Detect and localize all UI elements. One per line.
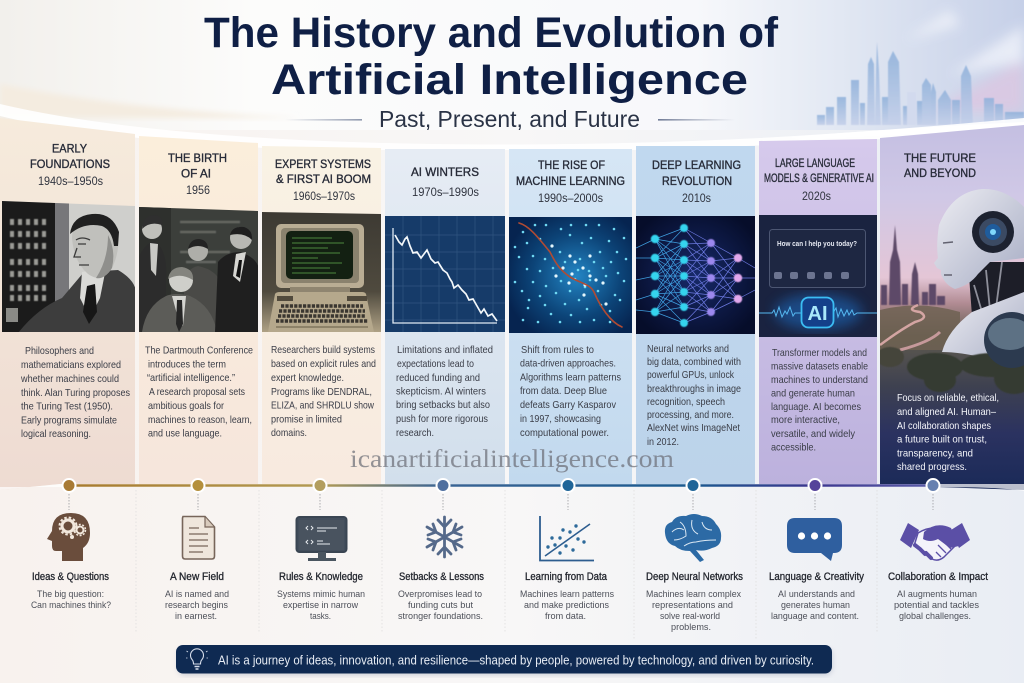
icon: chat bubble bbox=[787, 518, 842, 561]
text: early foundations: whether machines could bbox=[20, 374, 119, 385]
label: deep neural networks: representations and bbox=[652, 600, 733, 611]
column: learning from data bbox=[520, 516, 614, 622]
subtitle: Past, Present, and Future bbox=[379, 106, 640, 132]
text: expert systems bbox=[271, 345, 376, 439]
label: deep neural networks: Deep Neural Networks bbox=[646, 571, 744, 583]
text: the future: and aligned AI. Human– bbox=[897, 407, 996, 418]
text: birth of AI: ambitious goals for bbox=[148, 401, 225, 412]
label: deep neural networks: Machines learn complex bbox=[646, 589, 741, 600]
label: deep neural networks: problems. bbox=[671, 622, 711, 633]
text: machine learning: data-driven approaches. bbox=[520, 358, 616, 370]
title: Artificial Intelligence bbox=[271, 57, 748, 104]
label: rules and knowledge: expertise in narrow bbox=[283, 600, 358, 611]
text: machine learning: in 1997, showcasing bbox=[520, 414, 601, 425]
label: setbacks and lessons: stronger foundations. bbox=[398, 611, 483, 622]
text: birth of AI: and use language. bbox=[148, 428, 222, 440]
label: learning from data: Learning from Data bbox=[525, 571, 607, 583]
text: expert systems: Researchers build systems bbox=[271, 345, 375, 356]
label: a new field: A New Field bbox=[170, 571, 224, 583]
title: The History and Evolution of bbox=[204, 10, 779, 57]
panel: rise of machine learning bbox=[509, 149, 632, 484]
heading: expert systems: & FIRST AI BOOM bbox=[276, 172, 371, 186]
heading: expert systems: 1960s–1970s bbox=[293, 191, 355, 203]
text: large language models: massive datasets enable bbox=[771, 362, 868, 372]
text: early foundations: Early programs simulate bbox=[21, 416, 117, 426]
image: neural network bbox=[636, 216, 755, 334]
text: deep learning: recognition, speech bbox=[647, 397, 725, 408]
text: AI winters: bring setbacks but also bbox=[396, 400, 490, 411]
label: setbacks and lessons: Overpromises lead to bbox=[398, 589, 482, 600]
text: expert systems: domains. bbox=[271, 428, 307, 439]
icon: snowflake bbox=[427, 517, 462, 557]
text: deep learning: Neural networks and bbox=[647, 344, 729, 355]
banner bbox=[176, 645, 832, 675]
label: ideas and questions: Can machines think? bbox=[31, 600, 111, 611]
heading: machine learning: 1990s–2000s bbox=[538, 193, 603, 205]
panel: AI winters bbox=[385, 149, 505, 484]
icon: handshake bbox=[900, 523, 970, 560]
label: setbacks and lessons: Setbacks & Lessons bbox=[399, 571, 485, 583]
text: AI winters: Limitations and inflated bbox=[397, 345, 493, 356]
text: machine learning: Shift from rules to bbox=[521, 345, 594, 356]
image: chat interface: How can I help you today? bbox=[777, 239, 857, 248]
column: deep neural networks bbox=[646, 514, 744, 633]
image: dartmouth group bbox=[139, 205, 259, 333]
text: deep learning: big data, combined with bbox=[647, 357, 741, 368]
image: declining line chart bbox=[385, 216, 505, 333]
text: expert systems: expert knowledge. bbox=[271, 373, 344, 384]
text: birth of AI: The Dartmouth Conference bbox=[145, 346, 253, 356]
text: expert systems: promise in limited bbox=[271, 414, 342, 426]
label: learning from data: from data. bbox=[545, 611, 586, 622]
label: ideas and questions: Ideas & Questions bbox=[32, 571, 110, 583]
text: AI winters: skepticism. AI winters bbox=[396, 386, 486, 398]
text: early foundations: Philosophers and bbox=[25, 346, 94, 357]
label: collaboration and impact bbox=[888, 571, 988, 622]
icon: monitor with code bbox=[296, 517, 346, 561]
text: the future: transparency, and bbox=[897, 448, 973, 460]
text: large language models: language. AI becomes bbox=[771, 402, 861, 413]
label: a new field: AI is named and bbox=[165, 589, 229, 600]
label: deep neural networks: solve real-world bbox=[660, 611, 720, 622]
text: birth of AI: machines to reason, learn, bbox=[148, 415, 252, 426]
text: deep learning bbox=[647, 344, 741, 448]
text: deep learning: powerful GPUs, unlock bbox=[647, 370, 735, 381]
heading: birth of AI: OF AI bbox=[181, 166, 211, 180]
icon: head with gears bbox=[47, 513, 90, 561]
icon: brain bbox=[665, 514, 721, 562]
label: learning from data: and make predictions bbox=[524, 600, 609, 611]
image: chat interface bbox=[759, 215, 877, 337]
heading: deep learning: 2010s bbox=[682, 193, 711, 205]
column: rules and knowledge bbox=[277, 517, 365, 622]
text: large language models: Transformer models and bbox=[772, 348, 867, 359]
label: collaboration and impact: AI augments human bbox=[897, 589, 977, 600]
text: birth of AI bbox=[145, 346, 253, 440]
text: machine learning bbox=[520, 345, 621, 439]
icon: lightbulb bbox=[186, 649, 208, 669]
label: language and creativity: generates human bbox=[781, 600, 850, 611]
label: learning from data: Machines learn patterns bbox=[520, 589, 614, 600]
label: setbacks and lessons bbox=[398, 571, 485, 622]
label: a new field: research begins bbox=[165, 600, 228, 611]
column: collaboration and impact bbox=[888, 523, 988, 622]
heading: machine learning bbox=[516, 158, 625, 205]
column: setbacks and lessons bbox=[398, 517, 485, 622]
column: language and creativity bbox=[769, 518, 865, 622]
icon: document bbox=[182, 516, 214, 559]
text: deep learning: breakthroughs in image bbox=[647, 384, 741, 395]
heading: the future bbox=[904, 151, 976, 180]
text: AI winters bbox=[396, 345, 493, 439]
text: machine learning: from data. Deep Blue bbox=[520, 386, 607, 397]
text: early foundations: mathematicians explored bbox=[21, 360, 121, 371]
label: collaboration and impact: global challenges. bbox=[899, 611, 971, 622]
banner: AI is a journey of ideas, innovation, and resilience—shaped by people, powered by technology, and driven by curiosity. bbox=[218, 652, 814, 668]
label: learning from data bbox=[520, 571, 614, 622]
icon: scatter chart bbox=[540, 516, 594, 560]
label: rules and knowledge: Systems mimic human bbox=[277, 589, 365, 600]
label: rules and knowledge: tasks. bbox=[310, 611, 331, 622]
heading: AI winters: 1970s–1990s bbox=[412, 187, 479, 199]
text: early foundations bbox=[20, 346, 130, 440]
panel: deep learning bbox=[636, 146, 755, 484]
text: deep learning: in 2012. bbox=[647, 437, 679, 448]
title bbox=[204, 10, 779, 104]
column: a new field bbox=[165, 516, 229, 622]
skyline illustration bbox=[790, 10, 1024, 140]
text: the future bbox=[897, 393, 999, 473]
text: early foundations: think. Alan Turing proposes bbox=[21, 388, 130, 399]
label: ideas and questions: The big question: bbox=[37, 589, 104, 600]
text: machine learning: defeats Garry Kasparov bbox=[520, 400, 617, 411]
text: the future: Focus on reliable, ethical, bbox=[897, 393, 999, 404]
heading: AI winters bbox=[411, 165, 479, 199]
heading: early foundations: 1940s–1950s bbox=[38, 176, 103, 188]
panel: expert systems bbox=[262, 146, 382, 484]
text: AI winters: push for more rigorous bbox=[396, 414, 488, 425]
text: the future: shared progress. bbox=[897, 462, 967, 473]
heading: large language models: 2020s bbox=[802, 191, 831, 203]
text: AI winters: reduced funding and bbox=[396, 373, 480, 384]
heading: deep learning: DEEP LEARNING bbox=[652, 158, 741, 172]
text: expert systems: based on explicit rules and bbox=[271, 359, 376, 370]
heading: large language models: LARGE LANGUAGE bbox=[775, 156, 855, 170]
heading: machine learning: THE RISE OF bbox=[538, 158, 605, 172]
heading: the future: AND BEYOND bbox=[904, 166, 976, 180]
text: machine learning: Algorithms learn patterns bbox=[520, 372, 621, 384]
label: language and creativity: language and content. bbox=[771, 611, 859, 622]
text: birth of AI: introduces the term bbox=[148, 360, 226, 370]
text: large language models bbox=[771, 348, 868, 454]
heading: early foundations: FOUNDATIONS bbox=[30, 157, 110, 171]
heading: birth of AI: 1956 bbox=[186, 185, 210, 197]
heading: machine learning: MACHINE LEARNING bbox=[516, 174, 625, 188]
watermark: icanartificialintelligence.com bbox=[350, 446, 675, 473]
panel: birth of AI bbox=[139, 136, 259, 484]
text: deep learning: AlexNet wins ImageNet bbox=[647, 423, 740, 434]
text: machine learning: computational power. bbox=[520, 428, 609, 439]
text: expert systems: ELIZA, and SHRDLU show bbox=[271, 400, 375, 412]
heading: birth of AI: THE BIRTH bbox=[168, 151, 227, 165]
heading: birth of AI bbox=[168, 151, 227, 197]
text: expert systems: Programs like DENDRAL, bbox=[271, 387, 372, 398]
text: the future: a future built on trust, bbox=[897, 434, 987, 446]
text: the future: AI collaboration shapes bbox=[897, 421, 991, 432]
text: AI winters: research. bbox=[396, 428, 434, 439]
label: language and creativity bbox=[769, 571, 865, 622]
label: language and creativity: AI understands and bbox=[778, 589, 855, 600]
image: portrait with machine bbox=[2, 200, 136, 333]
text: birth of AI: “artificial intelligence.” bbox=[147, 373, 236, 384]
heading: large language models: MODELS & GENERATIVE AI bbox=[764, 171, 874, 185]
label: collaboration and impact: Collaboration & Impact bbox=[888, 571, 988, 583]
label: collaboration and impact: potential and tackles bbox=[894, 600, 979, 611]
text: large language models: machines to understand bbox=[771, 375, 868, 386]
timeline bbox=[0, 479, 1024, 640]
label: setbacks and lessons: funding cuts but bbox=[408, 600, 473, 611]
heading: early foundations bbox=[30, 142, 110, 188]
heading: deep learning: REVOLUTION bbox=[662, 174, 732, 188]
column: ideas and questions bbox=[31, 513, 111, 611]
label: a new field: in earnest. bbox=[175, 611, 217, 622]
text: birth of AI: A research proposal sets bbox=[149, 387, 245, 398]
heading: the future: THE FUTURE bbox=[904, 151, 976, 165]
image: scatter with decision curve bbox=[509, 217, 632, 334]
panel: large language models bbox=[759, 139, 877, 484]
heading: AI winters: AI WINTERS bbox=[411, 165, 479, 179]
label: rules and knowledge bbox=[277, 571, 365, 622]
label: ideas and questions bbox=[31, 571, 111, 611]
text: early foundations: the Turing Test (1950). bbox=[21, 402, 113, 412]
text: early foundations: logical reasoning. bbox=[21, 429, 91, 440]
heading: expert systems: EXPERT SYSTEMS bbox=[275, 157, 371, 171]
text: large language models: accessible. bbox=[771, 442, 816, 454]
heading: large language models bbox=[764, 156, 874, 203]
text: large language models: and generate human bbox=[771, 388, 855, 400]
image: robot and city bbox=[876, 120, 1024, 492]
heading: expert systems bbox=[275, 157, 371, 203]
text: large language models: versatile, and widely bbox=[771, 429, 856, 440]
text: deep learning: processing, and more. bbox=[647, 410, 734, 421]
image: vintage computer bbox=[262, 212, 382, 334]
panel: the future bbox=[876, 120, 1024, 492]
image: chat interface: AI bbox=[808, 303, 828, 325]
label: deep neural networks bbox=[646, 571, 744, 633]
heading: early foundations: EARLY bbox=[52, 142, 87, 156]
text: AI winters: expectations lead to bbox=[397, 359, 474, 370]
heading: deep learning bbox=[652, 158, 741, 205]
label: rules and knowledge: Rules & Knowledge bbox=[279, 571, 363, 583]
text: large language models: more interactive, bbox=[771, 415, 840, 426]
label: a new field bbox=[165, 571, 229, 622]
label: language and creativity: Language & Creativity bbox=[769, 571, 865, 583]
panel: early foundations bbox=[0, 118, 136, 490]
white arc band bbox=[0, 104, 1024, 150]
